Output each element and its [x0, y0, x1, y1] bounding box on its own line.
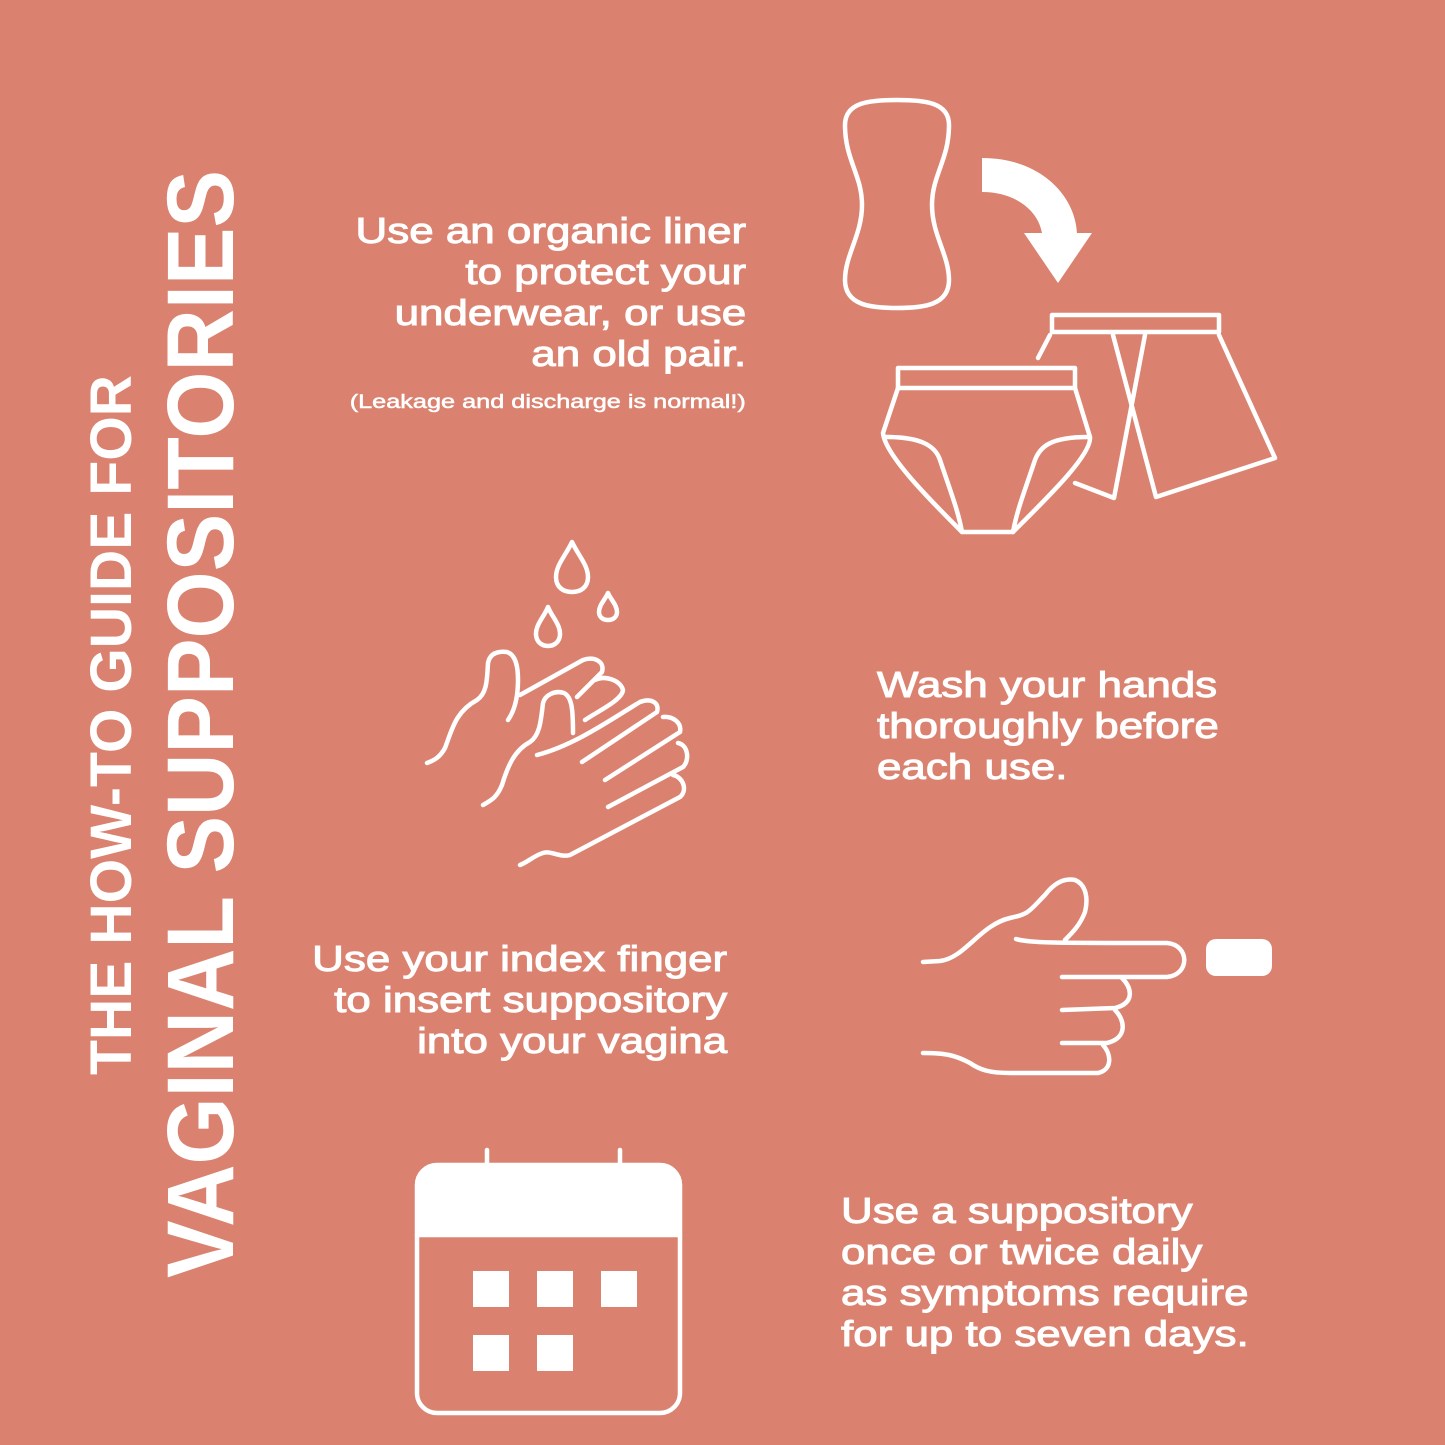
text: wash hands: each use. — [877, 746, 1067, 787]
text: wash hands — [876, 664, 1219, 787]
title: THE HOW-TO GUIDE FOR — [79, 375, 144, 1075]
text: frequency: once or twice daily — [841, 1231, 1202, 1272]
text: index finger: into your vagina — [417, 1020, 727, 1061]
text: wash hands: Wash your hands — [877, 664, 1217, 705]
text: wash hands: thoroughly before — [877, 705, 1219, 746]
text: liner: Use an organic liner — [355, 210, 746, 251]
text: frequency: Use a suppository — [841, 1190, 1193, 1231]
text: frequency: for up to seven days. — [841, 1313, 1249, 1354]
icon: pointing finger with suppository — [923, 880, 1272, 1073]
icon: liner to underwear — [845, 100, 1275, 532]
title — [79, 170, 254, 1278]
text: liner: to protect your — [465, 251, 746, 292]
title: VAGINAL SUPPOSITORIES — [148, 170, 254, 1278]
icon: calendar — [417, 1150, 680, 1413]
text: liner: underwear, or use — [394, 292, 746, 333]
text: frequency — [841, 1190, 1249, 1354]
text: index finger: Use your index finger — [312, 938, 727, 979]
icon: washing hands — [427, 542, 687, 865]
text: liner — [355, 210, 746, 374]
text: liner: an old pair. — [531, 333, 746, 374]
text: frequency: as symptoms require — [841, 1272, 1249, 1313]
text: index finger: to insert suppository — [334, 979, 727, 1020]
text: note: (Leakage and discharge is normal!) — [350, 392, 746, 413]
text: index finger — [312, 938, 728, 1061]
